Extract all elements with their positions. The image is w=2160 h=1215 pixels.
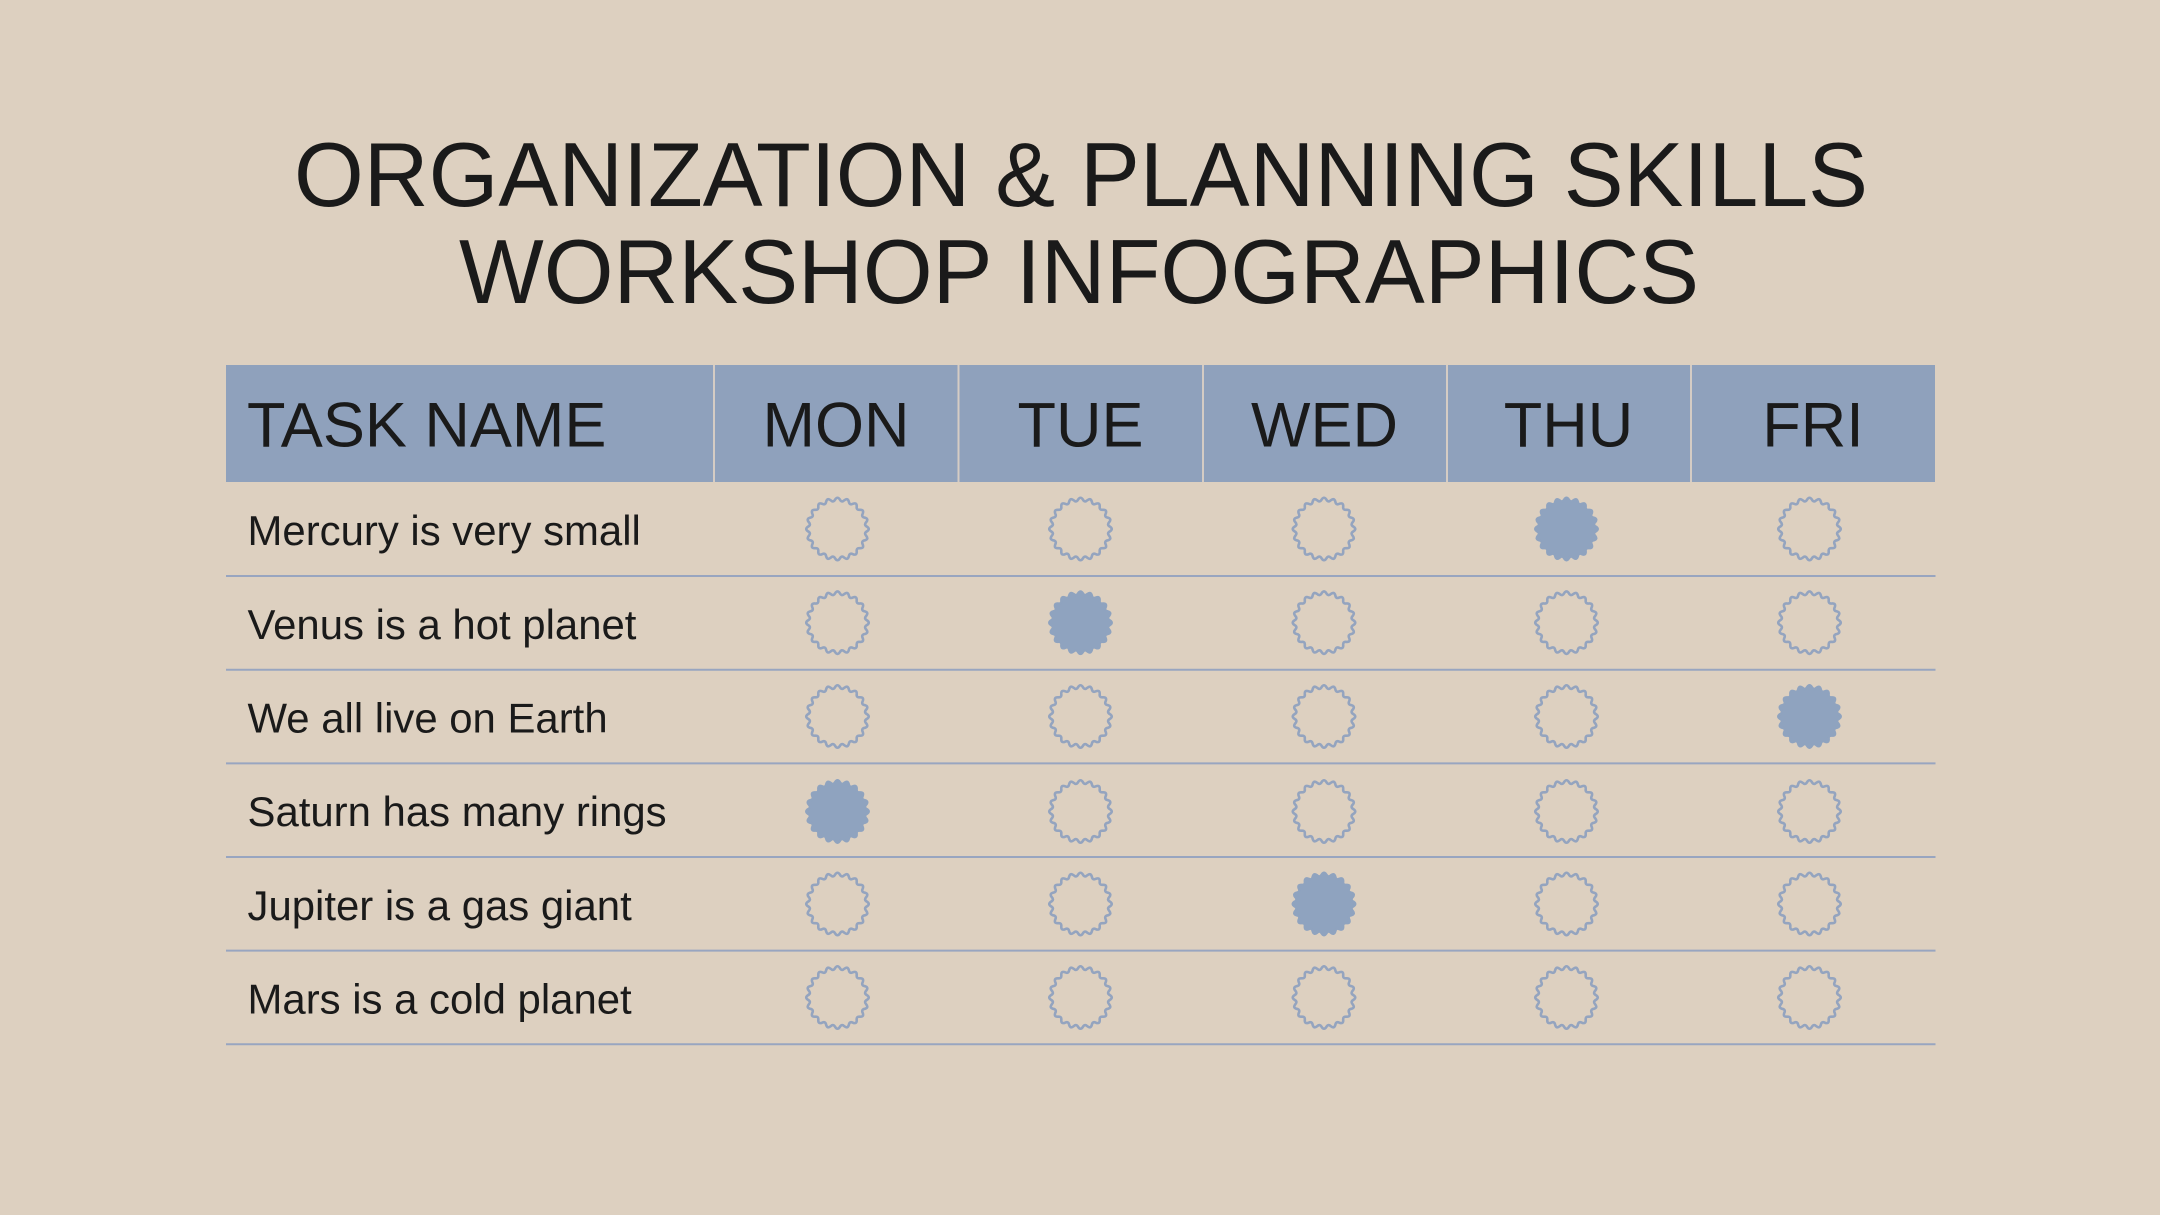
row lines	[226, 576, 1936, 1044]
task names: Mars is a cold planet	[248, 976, 632, 1022]
title: ORGANIZATION & PLANNING SKILLS	[294, 125, 1868, 226]
task names	[248, 507, 667, 1022]
title: WORKSHOP INFOGRAPHICS	[459, 222, 1699, 323]
task names: Mercury is very small	[248, 507, 641, 554]
table header: FRI	[1762, 390, 1864, 460]
badges: outlined	[806, 498, 1841, 1029]
table header: MON	[763, 390, 909, 460]
badges: filled	[806, 498, 1841, 935]
table header: THU	[1504, 390, 1633, 460]
table header: TASK NAME	[247, 390, 606, 460]
task names: Jupiter is a gas giant	[248, 882, 632, 929]
task names: Saturn has many rings	[248, 788, 667, 835]
task names: Venus is a hot planet	[248, 601, 637, 648]
table	[226, 365, 1936, 1044]
table header: TUE	[1018, 390, 1144, 460]
table header	[226, 365, 1935, 482]
task names: We all live on Earth	[248, 694, 608, 742]
title	[294, 125, 1868, 323]
table header: WED	[1251, 390, 1398, 460]
